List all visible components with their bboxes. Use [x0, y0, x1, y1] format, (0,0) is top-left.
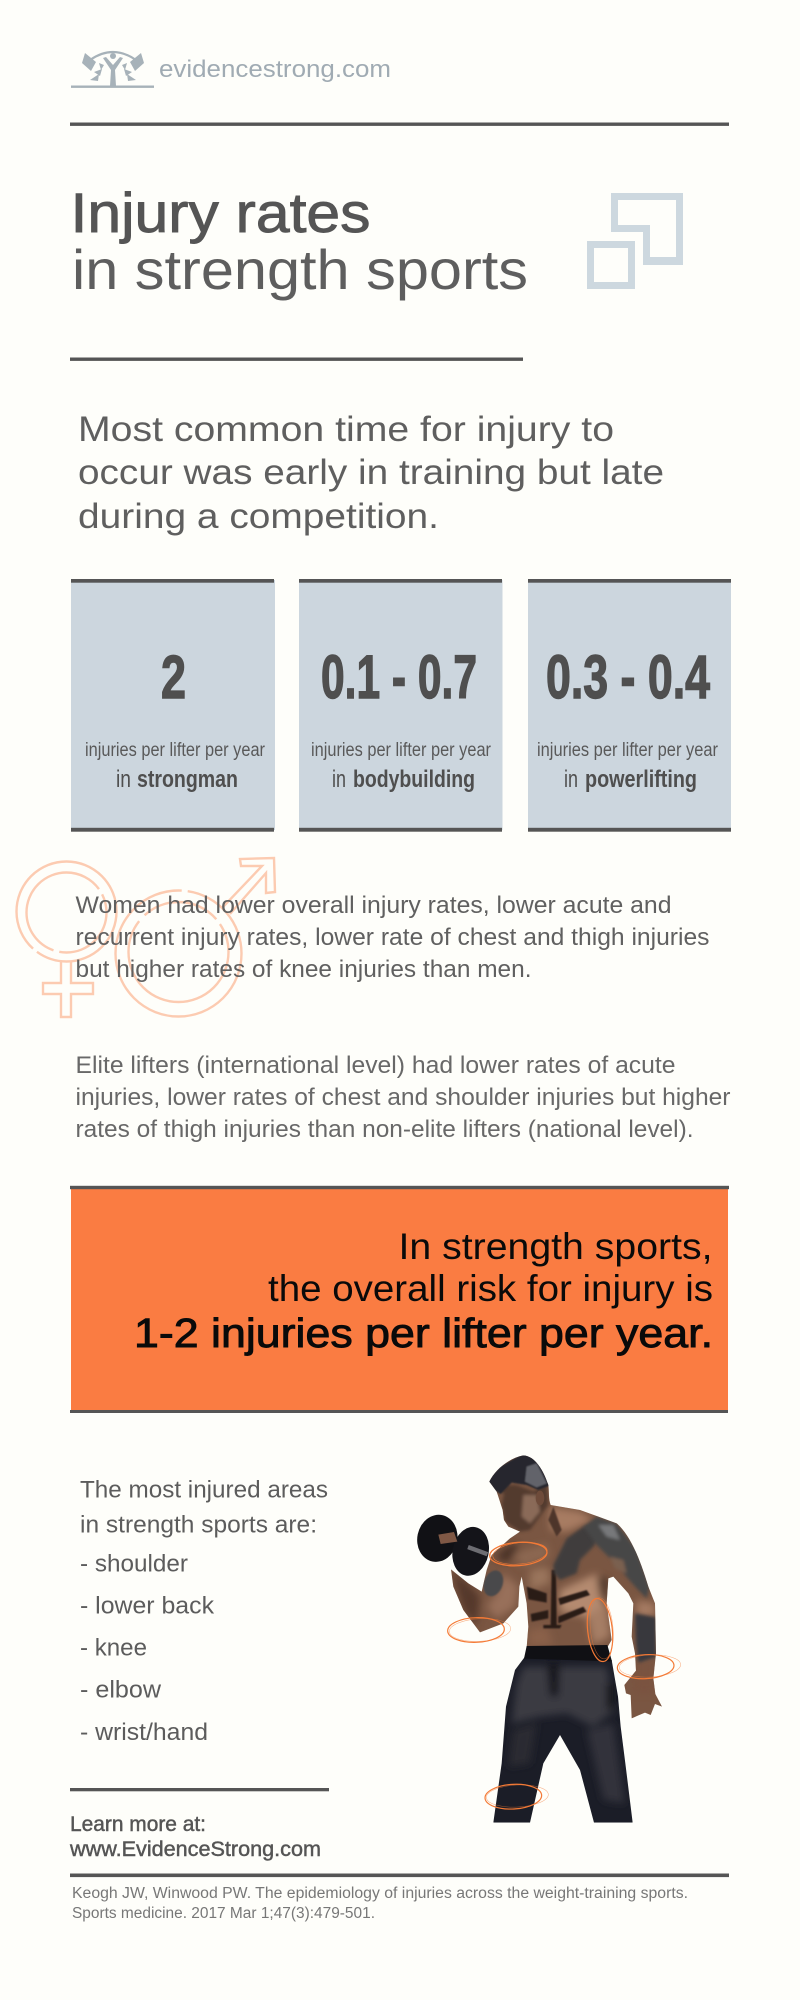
- hair: [489, 1455, 548, 1494]
- stat sport: powerlifting: [585, 766, 697, 793]
- illustration: muscular man curling a dumbbell: [413, 1453, 681, 1827]
- text: elite lifters: Elite lifters (international level) had lower rates of acute: [76, 1052, 676, 1079]
- pants: [490, 1653, 637, 1827]
- call to action: learn more: Learn more at:: [70, 1813, 206, 1836]
- stat sport: bodybuilding: [353, 766, 475, 793]
- text: elite lifters: [76, 1052, 731, 1143]
- intro text: [78, 410, 664, 536]
- text: most injured areas list: in strength sports are:: [80, 1512, 317, 1539]
- icon: male symbol: [116, 858, 275, 1016]
- stat number: 0.3 - 0.4: [546, 643, 710, 711]
- stat sport: [116, 766, 238, 793]
- ear: [536, 1491, 544, 1505]
- shoulder and arm tattoo: [583, 1517, 649, 1598]
- text: most injured areas list: The most injured areas: [80, 1476, 328, 1504]
- callout text: In strength sports,: [398, 1226, 712, 1267]
- text: most injured areas list: [80, 1476, 328, 1746]
- title line 2: in strength sports: [72, 238, 528, 301]
- callout: overall risk: [70, 1186, 729, 1413]
- text: most injured areas list: - knee: [80, 1635, 147, 1662]
- forearm tattoo: [635, 1613, 656, 1663]
- orange injury circles: [447, 1540, 681, 1810]
- text: most injured areas list: - wrist/hand: [80, 1719, 208, 1746]
- text: most injured areas list: - shoulder: [80, 1551, 188, 1578]
- citation: Sports medicine. 2017 Mar 1;47(3):479-501.: [72, 1905, 375, 1922]
- text: most injured areas list: - lower back: [80, 1592, 215, 1620]
- abdominal muscle lines: [527, 1507, 590, 1628]
- text: elite lifters: rates of thigh injuries than non-elite lifters (national level).: [76, 1116, 693, 1143]
- dumbbell: [413, 1511, 493, 1579]
- icon: tree logo: [71, 52, 154, 88]
- chest tattoo: [552, 1524, 596, 1581]
- stat label: injuries per lifter per year: [537, 740, 719, 761]
- icon: female symbol: [16, 862, 116, 1017]
- soft muscle light and shadow: [451, 1507, 655, 1693]
- biceps tattoo: [482, 1570, 504, 1597]
- stat label: injuries per lifter per year: [311, 740, 492, 761]
- text: gender differences: but higher rates of knee injuries than men.: [76, 956, 532, 983]
- text: gender differences: recurrent injury rates, lower rate of chest and thigh injuries: [76, 924, 710, 951]
- callout text: the overall risk for injury is: [268, 1268, 713, 1309]
- text: most injured areas list: - elbow: [80, 1677, 161, 1704]
- panel: bodybuilding stat: [299, 579, 502, 832]
- intro text: occur was early in training but late: [78, 453, 664, 492]
- stat sport: in: [116, 766, 131, 793]
- intro text: during a competition.: [78, 497, 439, 536]
- logo wordmark: evidencestrong.com: [159, 56, 391, 83]
- text: gender differences: [76, 892, 710, 983]
- logo: evidencestrong.com: [71, 52, 391, 88]
- circle: wrist: [617, 1653, 681, 1680]
- stat sport: strongman: [137, 766, 238, 793]
- icon: overlapping squares: [587, 193, 683, 289]
- icon: female and male symbols: [16, 858, 275, 1017]
- stat label: injuries per lifter per year: [85, 740, 266, 761]
- callout text: 1-2 injuries per lifter per year.: [134, 1310, 713, 1356]
- call to action: learn more: [69, 1813, 321, 1861]
- circle: elbow: [447, 1617, 511, 1643]
- waistband: [524, 1645, 612, 1661]
- circle: knee: [484, 1783, 549, 1810]
- stat sport: in: [564, 766, 578, 793]
- call to action: learn more: www.EvidenceStrong.com: [69, 1838, 321, 1861]
- panel: strongman stat: [71, 579, 275, 832]
- face: [495, 1485, 548, 1532]
- citation: [72, 1885, 688, 1922]
- torso, arms and head: [447, 1453, 667, 1720]
- circle: lower back: [584, 1597, 616, 1663]
- stat number: 2: [161, 643, 186, 711]
- text: gender differences: Women had lower overall injury rates, lower acute and: [76, 892, 672, 919]
- text: elite lifters: injuries, lower rates of chest and shoulder injuries but higher: [76, 1084, 731, 1111]
- stat number: 0.1 - 0.7: [321, 643, 477, 711]
- callout text: [134, 1226, 713, 1356]
- intro text: Most common time for injury to: [78, 410, 614, 449]
- title line 1: Injury rates: [70, 181, 370, 244]
- stat sport: in: [332, 766, 346, 793]
- panel: powerlifting stat: [528, 579, 731, 832]
- citation: Keogh JW, Winwood PW. The epidemiology of injuries across the weight-training sports.: [72, 1885, 688, 1902]
- circle: shoulder: [489, 1540, 548, 1568]
- title: [70, 181, 528, 301]
